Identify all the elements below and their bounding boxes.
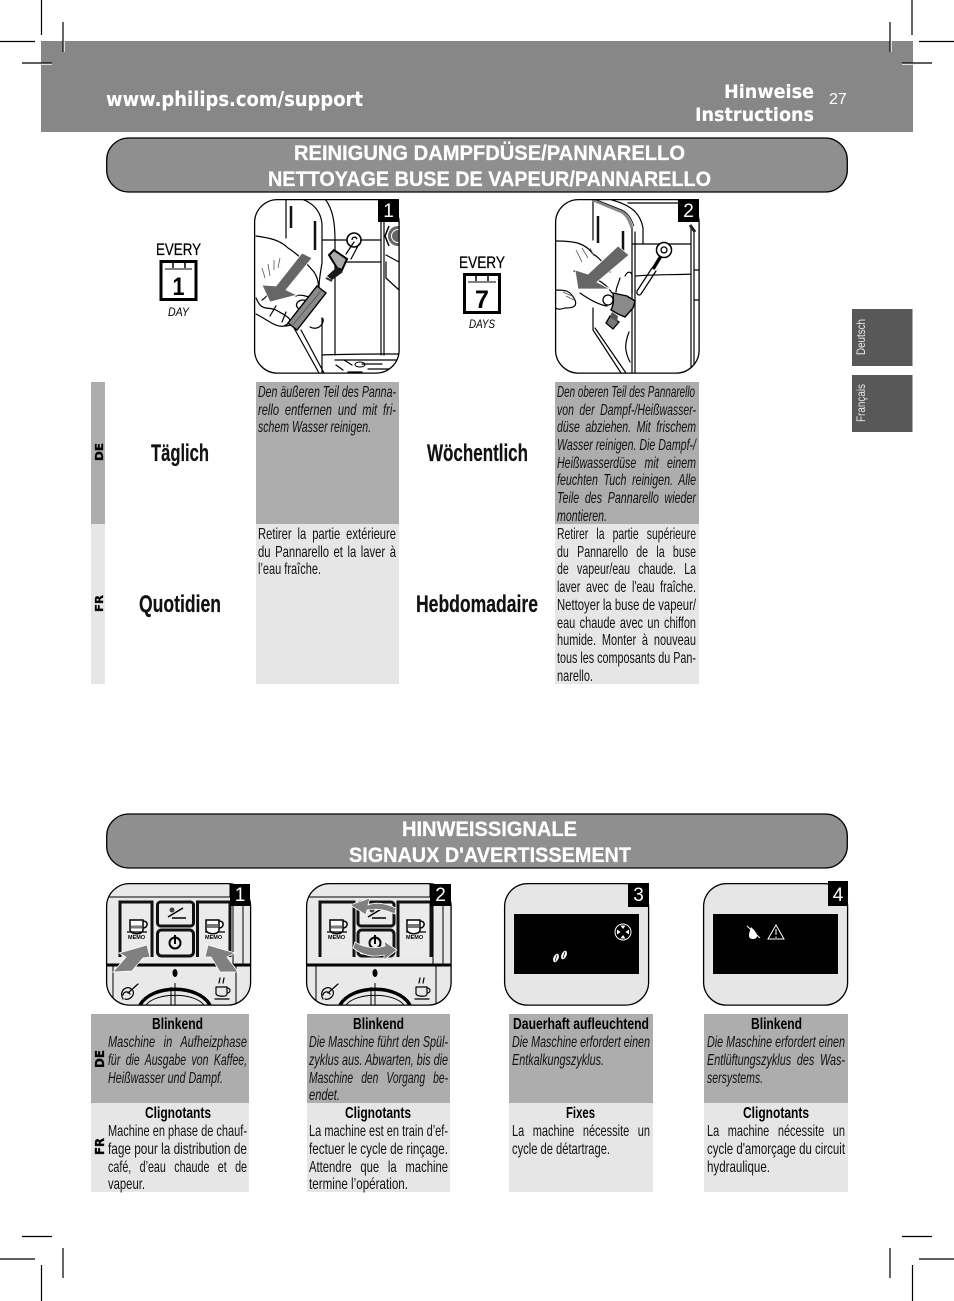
text cell: weekly DE: feuchten Tuch reinigen. Alle [557,472,696,489]
pannarello sleeve [606,293,635,329]
illustration: control panel 2: MEMO [406,935,424,941]
text cell: weekly FR: tous les composants du Pan- [557,650,696,667]
text cell: signal 4: Entlüftungszyklus des Was- [707,1052,845,1069]
text cell: signal 1: Clignotants [145,1105,211,1122]
step number 2 [430,884,451,906]
step number 2: 2 [435,885,446,906]
language strip DE [91,382,106,524]
label: Hebdomadaire: Hebdomadaire [416,591,538,618]
text cell: signal 2: Attendre que la machine [309,1159,448,1176]
label: Täglich: Täglich [151,440,209,467]
arrow [575,246,629,289]
text cell: weekly DE: montieren. [557,508,607,525]
text cell: signal 2: fectuer le cycle de rinçage. [309,1141,448,1158]
text cell: daily FR: du Pannarello et la laver à [258,544,396,561]
illustration: display with water warning icons [704,881,848,1005]
text cell: signal 1: DE [93,1050,107,1068]
illustration: control panel 2 [307,884,451,1005]
arrow [262,253,312,302]
hand [556,241,620,309]
text cell: signal 4: sersystems. [707,1070,763,1087]
section name [695,81,814,126]
label: Quotidien: Quotidien [139,591,221,618]
text cell: signal 1: für die Ausgabe von Kaffee, [108,1052,247,1069]
label: Wöchentlich: Wöchentlich [427,440,528,467]
arrows [113,945,150,972]
text cell: weekly FR: du Pannarello de la buse [557,544,696,561]
steam wand [637,242,672,295]
steam wand and nozzle [326,233,361,281]
icon: warning triangle [768,925,784,939]
language strip FR: FR [93,594,106,612]
text cell: signal 2: Die Maschine führt den Spül- [309,1034,448,1051]
text cell: signal 4: Blinkend [751,1016,802,1033]
icon: descale symbol [615,924,631,940]
text cell: daily DE [256,382,399,524]
text cell: signal 1: FR [93,1138,107,1155]
icon: every 1 day calendar: EVERY [156,240,201,259]
hand [256,236,323,328]
text cell: signal 1 [91,1014,249,1193]
heading: cleaning: REINIGUNG DAMPFDÜSE/PANNARELLO [294,142,685,165]
text cell: signal 1: café, d’eau chaude et de [108,1159,247,1176]
language tab: Français [852,375,913,432]
heading: warning signals: HINWEISSIGNALE [402,818,577,841]
text cell: signal 2: Blinkend [353,1016,404,1033]
text cell: weekly FR [555,524,699,685]
text cell: signal 2 [307,1014,450,1193]
text cell: signal 3: Entkalkungszyklus. [512,1052,604,1069]
text cell: signal 3: Dauerhaft aufleuchtend [513,1016,649,1033]
text cell: signal 2: Maschine den Vorgang be- [309,1070,448,1087]
illustration: control panel 1: MEMO [205,935,223,941]
text cell: signal 4: Die Maschine erfordert einen [707,1034,845,1051]
icon: coffee beans [552,950,568,963]
heading: cleaning [107,138,847,192]
text cell: signal 3: Fixes [566,1105,595,1122]
step number 2 [678,199,699,222]
text cell: signal 3: Die Maschine erfordert einen [512,1034,650,1051]
text cell: weekly DE: Teile des Pannarello wieder [557,490,696,507]
text cell: weekly DE: Wasser reinigen. Die Dampf-/ [557,437,697,454]
text cell: daily DE: Den äußeren Teil des Panna- [258,384,396,401]
step number 3: 3 [633,885,644,906]
section name: Instructions [695,104,814,126]
step number 1: 1 [383,201,394,222]
text cell: signal 3: cycle de détartrage. [512,1141,610,1158]
text cell: signal 4 [704,1014,848,1192]
text cell: signal 4: La machine nécessite un [707,1123,845,1140]
text cell: signal 2: Clignotants [345,1105,411,1122]
header band [41,41,913,132]
buttons [320,902,431,957]
arrows [350,898,396,915]
text cell: daily FR: Retirer la partie extérieure [258,526,396,543]
text cell: weekly DE [555,382,699,525]
text cell: signal 2: zyklus aus. Abwarten, bis die [308,1052,448,1069]
text cell: daily DE: rello entfernen und mit fri- [258,402,396,419]
text cell: signal 1: Blinkend [152,1016,203,1033]
language strip FR [91,524,106,684]
table: cleaning instructions [91,382,699,685]
text cell: signal 3 [509,1014,653,1192]
machine lines [593,200,699,373]
text cell: signal 4: Clignotants [743,1105,809,1122]
heading: warning signals: SIGNAUX D'AVERTISSEMENT [349,844,631,867]
icon: every 1 day calendar: 1 [172,273,185,301]
text cell: signal 1: Maschine in Aufheizphase [108,1034,247,1051]
text cell: daily FR [256,524,399,684]
illustration 2: removing upper Pannarello [556,198,699,373]
icon: every 1 day calendar [156,240,201,319]
text cell: weekly DE: Heißwasserdüse mit einem [557,455,696,472]
illustration: control panel 2: MEMO [328,935,346,941]
step number 1 [230,884,250,906]
step number 2: 2 [683,201,694,222]
text cell: weekly DE: von der Dampf-/Heißwasser- [557,402,696,419]
text cell: weekly FR: Nettoyer la buse de vapeur/ [557,597,696,614]
icon: every 1 day calendar: DAY [168,305,190,319]
icon: every 7 days calendar: 7 [475,286,489,314]
text cell: weekly FR: narello. [557,668,593,685]
step number 1: 1 [235,885,245,906]
dial [140,989,210,1005]
text cell: weekly FR: humide. Monter à nouveau [557,632,696,649]
text cell: weekly DE: Den oberen Teil des Pannarello [557,384,695,401]
text cell: weekly FR: Retirer la partie supérieure [557,526,696,543]
step number 4: 4 [833,885,844,906]
knob [384,226,398,246]
language strip DE: DE [93,443,106,461]
icon: no water [747,926,760,939]
step number 3 [628,883,649,907]
illustration: control panel 1: MEMO [128,935,146,941]
illustration: display with descaling icons [505,883,649,1005]
icon: every 7 days calendar: EVERY [459,253,505,272]
step number 1 [378,199,399,222]
text cell: signal 3: La machine nécessite un [512,1123,650,1140]
text cell: signal 2: La machine est en train d’ef- [309,1123,448,1140]
language tab: Deutsch [852,309,913,366]
text cell: signal 1: vapeur. [108,1176,145,1193]
illustration: control panel 1 [107,884,251,1005]
text cell: signal 2: termine l’opération. [309,1176,408,1193]
icon: every 7 days calendar: DAYS [469,317,495,331]
dial [340,989,410,1005]
text cell: signal 1: fage pour la distribution de [108,1141,247,1158]
text cell: daily FR: l’eau fraîche. [258,561,321,578]
text cell: signal 1: Heißwasser und Dampf. [108,1070,223,1087]
icon: every 7 days calendar [459,253,505,331]
text cell: weekly FR: eau chaude avec un chiffon [557,615,696,632]
machine lines [286,199,399,373]
text cell: weekly FR: laver avec de l'eau fraîche. [557,579,696,596]
text cell: signal 4: cycle d'amorçage du circuit [707,1141,845,1158]
text cell: weekly DE: düse abziehen. Mit frischem [557,419,696,436]
heading: warning signals [107,814,847,868]
page number: 27 [829,91,847,108]
language tab: Deutsch: Deutsch [854,319,868,355]
illustration 1: removing outer Pannarello [255,199,408,373]
language tab: Français: Français [854,384,868,422]
buttons [120,902,230,957]
section name: Hinweise [724,81,814,103]
text cell: signal 4: hydraulique. [707,1159,770,1176]
website address: www.philips.com/support [106,87,363,111]
pannarello sleeve [288,286,326,330]
step number 4 [828,881,848,906]
text cell: daily DE: schem Wasser reinigen. [258,419,371,436]
heading: cleaning: NETTOYAGE BUSE DE VAPEUR/PANNARELLO [268,168,711,191]
text cell: signal 1: Machine en phase de chauf- [108,1123,247,1140]
text cell: weekly FR: de vapeur/eau chaude. La [557,561,696,578]
text cell: signal 2: endet. [309,1087,340,1104]
